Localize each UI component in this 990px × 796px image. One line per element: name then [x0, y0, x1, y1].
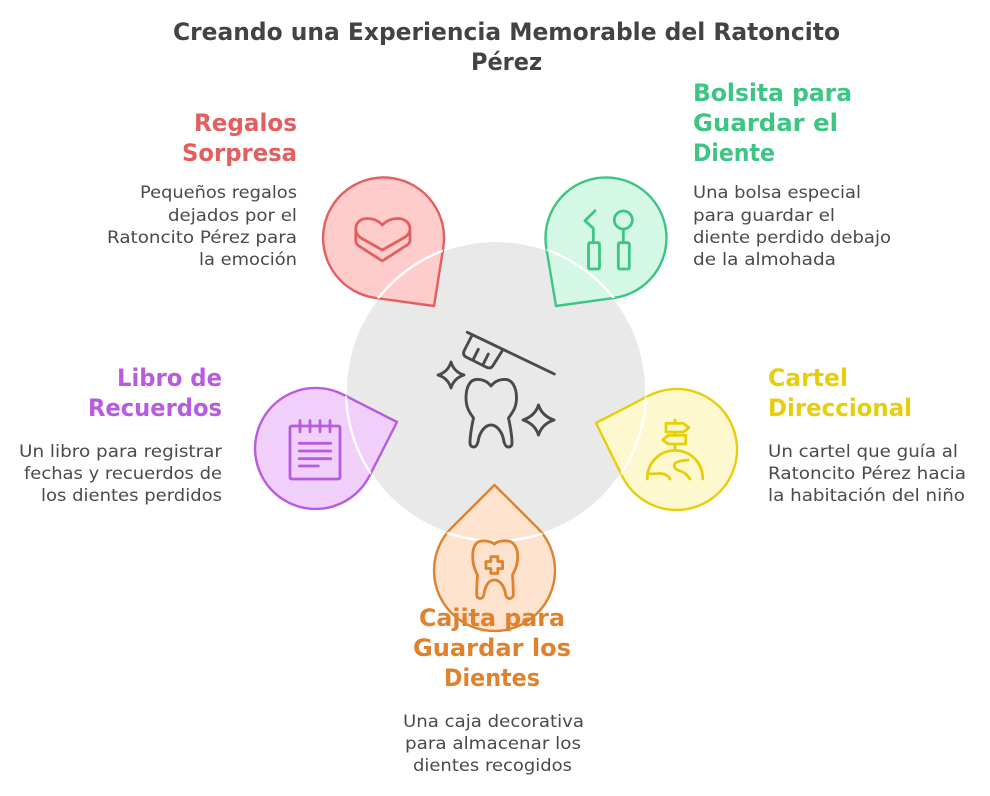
heading: regalos sorpresa: Regalos [194, 109, 297, 137]
heading: regalos sorpresa [182, 109, 297, 167]
pin: green [545, 177, 666, 306]
arc highlight: orange [446, 532, 544, 542]
title [173, 18, 840, 76]
heading: cajita: Guardar los [413, 634, 571, 662]
pin: purple [255, 388, 397, 509]
text: libro description [19, 442, 222, 505]
text: bolsita description: Una bolsa especial [693, 183, 861, 202]
text: cartel description: Un cartel que guía al [768, 442, 958, 461]
pin: orange [434, 485, 555, 631]
text: libro description: fechas y recuerdos de [24, 464, 222, 483]
panel: bolsita para guardar el diente [544, 82, 890, 308]
title: Creando una Experiencia Memorable del Ratoncito [173, 18, 840, 46]
panel: cajita para guardar los dientes [404, 484, 582, 774]
heading: cajita: Dientes [444, 664, 540, 692]
title: Pérez [471, 48, 542, 76]
icon: tooth with cross [473, 541, 518, 598]
heading: bolsita: Bolsita para [693, 79, 852, 107]
arc highlight: purple [344, 396, 372, 475]
text: bolsita description [693, 183, 891, 269]
text: cajita description [403, 712, 584, 775]
central grey circle [347, 242, 645, 540]
heading: libro de recuerdos: Recuerdos [88, 394, 222, 422]
text: bolsita description: para guardar el [693, 206, 835, 225]
text: cajita description: Una caja decorativa [403, 712, 584, 731]
text: cartel description: la habitación del niño [768, 486, 965, 505]
text: bolsita description: de la almohada [693, 250, 836, 269]
text: cajita description: dientes recogidos [413, 756, 572, 775]
icon: signpost on hill [647, 420, 703, 479]
text: regalos description: dejados por el [168, 206, 297, 225]
heading: cajita: Cajita para [419, 604, 565, 632]
heading: libro de recuerdos [88, 364, 222, 422]
text: bolsita description: diente perdido debajo [693, 228, 891, 247]
heading: libro de recuerdos: Libro de [117, 364, 222, 392]
central icon: tooth, toothbrush and sparkles [438, 332, 554, 447]
icon: notebook [290, 421, 340, 479]
icon: heart box [356, 218, 410, 261]
heading: bolsita: Guardar el [693, 109, 838, 137]
text: cartel description: Ratoncito Pérez hacia [768, 464, 966, 483]
heading: cartel direccional: Cartel [768, 364, 848, 392]
pin: red [323, 177, 444, 306]
panel: regalos sorpresa [108, 112, 446, 308]
text: regalos description: la emoción [199, 250, 297, 269]
arc highlight: yellow [620, 396, 648, 476]
text: cartel description [768, 442, 966, 505]
heading: cartel direccional [768, 364, 912, 422]
arc highlight: red [376, 250, 443, 298]
text: libro description: los dientes perdidos [41, 486, 222, 505]
text: cajita description: para almacenar los [405, 734, 581, 753]
text: regalos description: Ratoncito Pérez para [107, 228, 297, 247]
icon: dental tools [585, 211, 632, 269]
panel: cartel direccional [594, 368, 964, 512]
heading: cartel direccional: Direccional [768, 394, 912, 422]
heading: regalos sorpresa: Sorpresa [182, 139, 297, 167]
arc highlight: green [546, 248, 615, 298]
heading: cajita [413, 604, 571, 692]
text: libro description: Un libro para registrar [19, 442, 222, 461]
heading: bolsita: Diente [693, 139, 775, 167]
pin: yellow [596, 389, 737, 510]
text: regalos description [107, 183, 297, 269]
heading: bolsita [693, 79, 852, 167]
panel: libro de recuerdos [20, 368, 398, 510]
text: regalos description: Pequeños regalos [140, 183, 297, 202]
